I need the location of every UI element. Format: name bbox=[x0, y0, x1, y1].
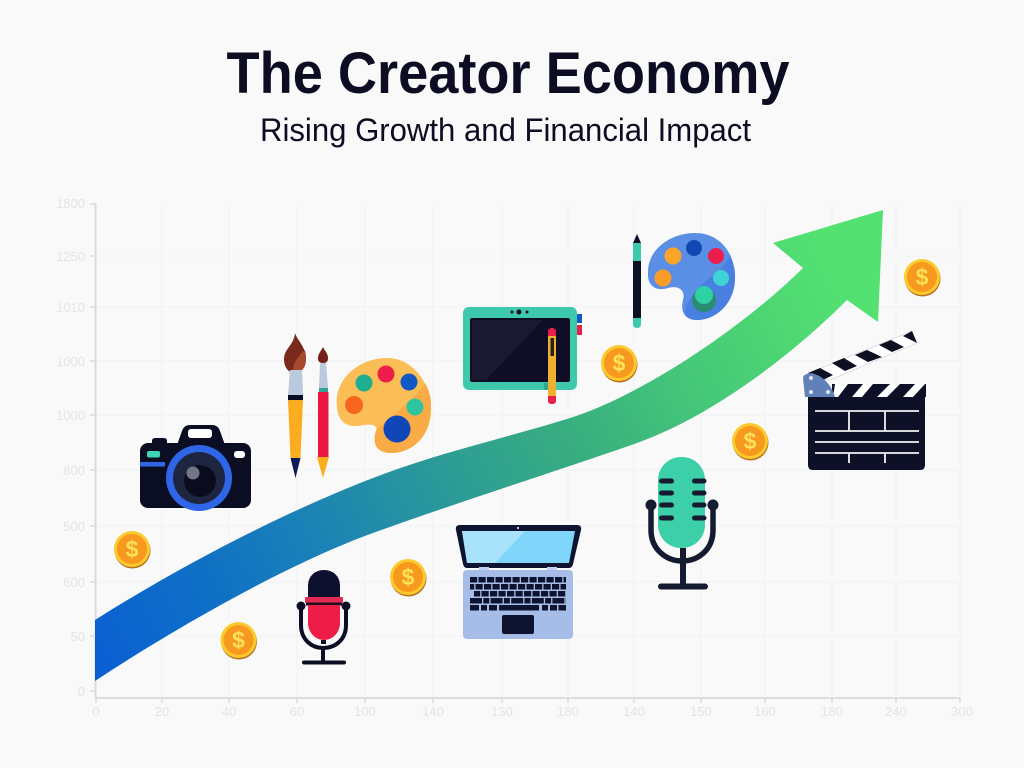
growth arrow bbox=[95, 210, 883, 681]
y axis labels: 1800 bbox=[56, 196, 85, 211]
icon: blue palette bbox=[648, 233, 735, 320]
y axis labels: 1000 bbox=[56, 408, 85, 423]
coin: $ bbox=[126, 536, 139, 562]
coin bbox=[904, 259, 940, 296]
x axis labels: 140 bbox=[623, 704, 645, 719]
coin bbox=[220, 622, 257, 660]
y axis labels: 500 bbox=[63, 519, 85, 534]
coin: $ bbox=[744, 428, 757, 454]
x axis labels: 150 bbox=[690, 704, 712, 719]
y axis labels: 600 bbox=[63, 575, 85, 590]
y axis labels: 1000 bbox=[56, 354, 85, 369]
coin: $ bbox=[402, 564, 415, 590]
icon: laptop bbox=[456, 525, 581, 639]
title: The Creator Economy bbox=[226, 41, 790, 106]
icon: stylus pen bbox=[633, 234, 641, 328]
icon: orange palette bbox=[337, 358, 431, 453]
icon: large paint brush bbox=[284, 333, 306, 478]
subtitle: Rising Growth and Financial Impact bbox=[260, 112, 751, 148]
x axis labels: 60 bbox=[290, 704, 304, 719]
y axis labels: 50 bbox=[71, 629, 85, 644]
x axis labels: 130 bbox=[491, 704, 513, 719]
coin: $ bbox=[232, 627, 245, 653]
coin bbox=[601, 345, 638, 382]
x axis labels: 180 bbox=[557, 704, 579, 719]
icon: drawing tablet bbox=[463, 307, 582, 404]
icon: clapperboard bbox=[803, 331, 926, 470]
x axis labels: 20 bbox=[155, 704, 169, 719]
x axis labels: 180 bbox=[821, 704, 843, 719]
x axis labels: 300 bbox=[951, 704, 973, 719]
x axis labels: 0 bbox=[92, 704, 100, 719]
coin bbox=[114, 531, 150, 568]
y axis labels: 1250 bbox=[56, 249, 85, 264]
x axis labels bbox=[92, 704, 973, 719]
y axis labels: 800 bbox=[63, 463, 85, 478]
icon: red microphone bbox=[296, 570, 350, 662]
coin: $ bbox=[613, 350, 626, 376]
x axis labels: 40 bbox=[222, 704, 236, 719]
x axis labels: 140 bbox=[422, 704, 444, 719]
y axis labels: 0 bbox=[78, 684, 85, 699]
y axis labels bbox=[56, 196, 85, 699]
x axis labels: 100 bbox=[354, 704, 376, 719]
tablet stylus bbox=[548, 328, 556, 404]
coin bbox=[732, 423, 768, 460]
y axis labels: 1010 bbox=[56, 300, 85, 315]
x axis labels: 160 bbox=[754, 704, 776, 719]
chart grid and axes bbox=[56, 196, 973, 719]
icon: teal microphone bbox=[646, 457, 718, 586]
x axis labels: 240 bbox=[885, 704, 907, 719]
coin bbox=[390, 559, 426, 596]
icon: thin paint brush bbox=[317, 347, 329, 478]
coin: $ bbox=[916, 264, 929, 290]
icon: camera bbox=[140, 425, 251, 511]
